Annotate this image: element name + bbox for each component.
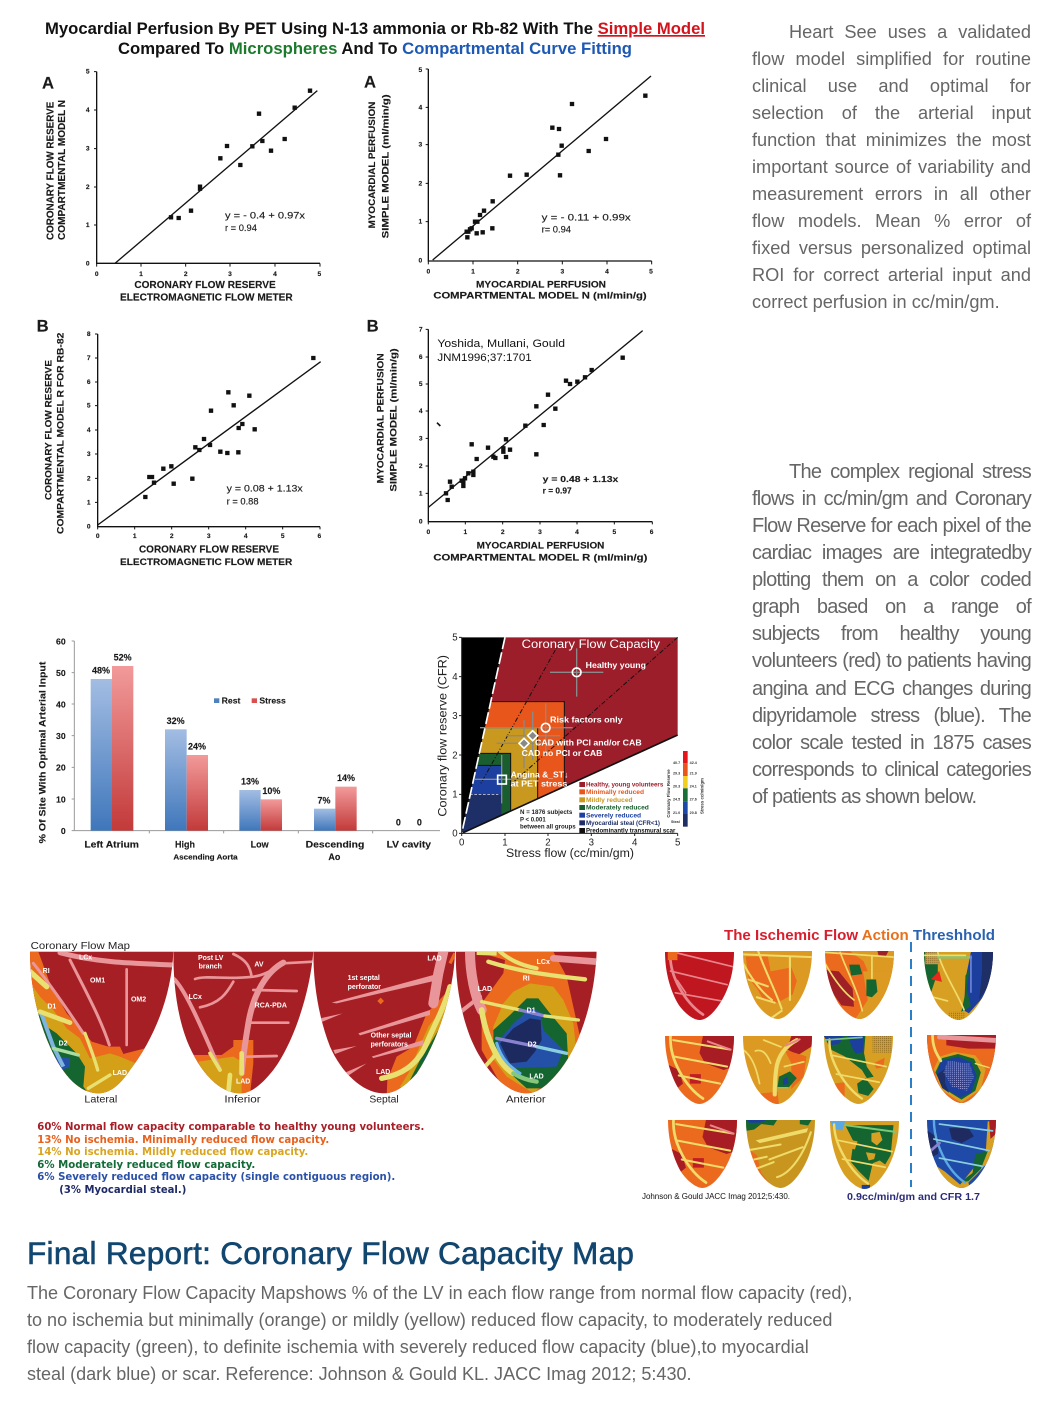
coronary flow map: lateral and inferior views: LAD	[236, 1078, 250, 1085]
small heart: row 3, gold septal view	[746, 1120, 815, 1188]
bar chart: optimal arterial input site	[37, 637, 440, 862]
coronary flow map: septal and anterior views: Anterior	[506, 1095, 547, 1106]
chart: coronary flow capacity: 0	[459, 837, 464, 848]
scatter plot: B, simple model vs compartmental model R: 0	[419, 519, 423, 526]
scatter plot: B, simple model vs compartmental model R: 1	[463, 529, 467, 536]
scatter plot: B, simple model vs compartmental model R: 5	[419, 381, 423, 388]
small heart: row 1, gold with orange	[743, 951, 812, 1019]
coronary flow map: lateral and inferior views: LAD	[113, 1070, 127, 1077]
scatter plot: A, simple model vs compartmental model N: 2	[516, 268, 520, 275]
scatter plot: A, coronary flow reserve vs electromagnetic flow meter: 5	[86, 69, 90, 76]
chart: coronary flow capacity: 1	[452, 790, 458, 801]
scatter plot: A, simple model vs compartmental model N: 0	[418, 257, 422, 264]
bar chart: optimal arterial input site: 30	[56, 731, 66, 741]
scatter plot: A, coronary flow reserve vs electromagnetic flow meter: 4	[86, 107, 90, 114]
bar chart: optimal arterial input site: 32%	[167, 716, 185, 726]
scatter plot: B, simple model vs compartmental model R: 2	[419, 463, 423, 470]
scatter plot: A, coronary flow reserve vs electromagnetic flow meter: COMPARTMENTAL MODEL N	[57, 100, 68, 240]
chart: coronary flow capacity: 2	[545, 837, 551, 848]
scatter plot: A, simple model vs compartmental model N: 1	[471, 268, 475, 275]
coronary flow map: septal and anterior views: D2	[528, 1042, 537, 1049]
colour scale: 20.8	[690, 811, 697, 815]
coronary flow map: septal and anterior views: D1	[527, 1007, 536, 1014]
text block: validated flow model: flow models. Mean % error of	[752, 211, 1031, 231]
flow map percentages legend: (3% Myocardial steal.)	[59, 1183, 186, 1196]
bar chart: optimal arterial input site: LV cavity	[387, 839, 431, 849]
scatter plot: A, coronary flow reserve vs electromagnetic flow meter: CORONARY FLOW RESERVE	[134, 280, 276, 291]
text block: validated flow model: function that minimizes the most	[752, 130, 1031, 150]
heart map: septal	[310, 950, 457, 1097]
coronary flow map: septal and anterior views: Other septal	[371, 1032, 411, 1039]
text block: regional stress flows: color scale tested in 1875 cases	[752, 732, 1031, 754]
text block: validated flow model: ROI for correct arterial input and	[752, 265, 1031, 285]
scatter plot: B, simple model vs compartmental model R: COMPARTMENTAL MODEL R (ml/min/g)	[433, 552, 647, 562]
bar chart: optimal arterial input site: Low	[251, 839, 269, 849]
chart: coronary flow capacity: Healthy young	[586, 660, 646, 670]
text block: validated flow model: clinical use and optimal for	[752, 76, 1031, 96]
scatter plot: B, coronary flow reserve model R for Rb-82: 6	[87, 379, 91, 386]
bar chart: optimal arterial input site: % Of Site With Optimal Arterial Input	[37, 662, 47, 843]
colour scale: Steal	[671, 820, 680, 824]
capacity legend: Moderately reduced	[586, 805, 649, 812]
scatter plot: B, simple model vs compartmental model R: JNM1996;37:1701	[437, 352, 532, 364]
scatter plot: B, simple model vs compartmental model R: 6	[650, 529, 654, 536]
scatter plot: A, simple model vs compartmental model N: y = - 0.11 + 0.99x	[542, 212, 631, 222]
scatter plot: A, coronary flow reserve vs electromagnetic flow meter	[42, 69, 321, 303]
coronary flow map: septal and anterior views: 1st septal	[348, 975, 380, 982]
scatter plot: B, coronary flow reserve model R for Rb-82: 4	[87, 427, 91, 434]
coronary flow map: lateral and inferior views: Post LV	[198, 955, 224, 962]
scatter plot: B, simple model vs compartmental model R: SIMPLE MODEL (ml/min/g)	[389, 348, 399, 492]
coronary flow map: lateral and inferior views: OM2	[131, 997, 146, 1004]
scatter plot: A, simple model vs compartmental model N: MYOCARDIAL PERFUSION	[476, 279, 606, 289]
scatter plot: A, coronary flow reserve vs electromagnetic flow meter: 0	[86, 260, 90, 267]
text block: regional stress flows: corresponds to clinical categories	[752, 759, 1031, 781]
scatter plot: B, coronary flow reserve model R for Rb-82: 4	[244, 533, 248, 540]
scatter plot: B, coronary flow reserve model R for Rb-82: B	[37, 317, 49, 336]
text block: regional stress flows: subjects from healthy young	[752, 623, 1031, 645]
coronary flow map: lateral and inferior views: RI	[43, 968, 50, 975]
bar chart: optimal arterial input site: 0	[396, 818, 401, 828]
scatter plot: B, coronary flow reserve model R for Rb-82: 6	[317, 533, 321, 540]
capacity legend: Myocardial steal (CFR<1)	[586, 820, 660, 827]
capacity legend: Minimally reduced	[586, 789, 644, 796]
chart: coronary flow capacity: CAD no PCI or CAB	[522, 748, 602, 758]
scatter plot: A, simple model vs compartmental model N	[364, 67, 653, 301]
chart: coronary flow capacity: Angina &_ST↓	[511, 769, 568, 779]
coronary flow map: septal and anterior views: LAD	[478, 986, 492, 993]
threshold values caption: 0.9cc/min/gm and CFR 1.7	[847, 1191, 980, 1203]
chart: coronary flow capacity: Coronary Flow Capacity	[522, 638, 660, 651]
text block: validated flow model: important source of variability and	[752, 157, 1031, 177]
scatter plot: B, coronary flow reserve model R for Rb-82: 0	[87, 524, 91, 531]
bar chart: optimal arterial input site: Ascending Aorta	[173, 854, 238, 861]
bar chart: optimal arterial input site: 0	[61, 826, 66, 836]
colour scale: 29.3	[673, 771, 680, 775]
bar chart: optimal arterial input site: 13%	[241, 776, 259, 786]
coronary flow map: lateral and inferior views: Lateral	[84, 1095, 117, 1106]
scatter plot: A, coronary flow reserve vs electromagnetic flow meter: 1	[139, 271, 143, 278]
text block: regional stress flows: dipyridamole stress (blue). The	[752, 705, 1031, 727]
text block: final report description	[27, 1283, 852, 1384]
scatter plot: B, simple model vs compartmental model R: 1	[419, 490, 423, 497]
scatter plot: B, simple model vs compartmental model R: B	[367, 317, 379, 336]
scatter plot: A, simple model vs compartmental model N: 1	[418, 219, 422, 226]
scatter plot: B, simple model vs compartmental model R: 7	[419, 326, 423, 333]
coronary flow map: lateral and inferior views: LCx	[79, 955, 92, 962]
text block: regional stress flows	[752, 461, 1032, 808]
scatter plot: B, simple model vs compartmental model R	[367, 317, 654, 562]
scatter plot: A, coronary flow reserve vs electromagnetic flow meter: ELECTROMAGNETIC FLOW METER	[120, 292, 293, 303]
chart: coronary flow capacity: at PET stress	[511, 778, 568, 788]
colour scale: Stress cc/min/gm	[699, 778, 704, 814]
heart map: lateral	[30, 952, 174, 1094]
scatter plot: B, simple model vs compartmental model R: 3	[419, 435, 423, 442]
flow map percentages legend: 6% Severely reduced flow capacity (single contiguous region).	[37, 1170, 395, 1183]
scatter plot: A, simple model vs compartmental model N: A	[364, 72, 376, 91]
flow map percentages legend	[37, 1120, 424, 1196]
capacity legend	[579, 782, 676, 835]
bar chart: optimal arterial input site: 10	[56, 794, 66, 804]
scatter plot: A, simple model vs compartmental model N: 3	[418, 142, 422, 149]
scatter plot: A, simple model vs compartmental model N: 4	[418, 104, 422, 111]
scatter plot: B, simple model vs compartmental model R: Yoshida, Mullani, Gould	[437, 338, 565, 350]
flow map percentages legend: 13% No ischemia. Minimally reduced flow capacity.	[37, 1133, 329, 1146]
chart: coronary flow capacity: Risk factors only	[550, 714, 623, 724]
scatter plot: A, simple model vs compartmental model N: 3	[560, 268, 564, 275]
text block: validated flow model: measurement errors in all other	[752, 184, 1031, 204]
bar chart: optimal arterial input site: 52%	[114, 653, 132, 663]
threshold title: The Ischemic Flow Action Threshhold	[724, 927, 995, 944]
chart: coronary flow capacity: 5	[452, 633, 458, 644]
scatter plot: B, simple model vs compartmental model R: 4	[575, 529, 579, 536]
scatter plot: A, coronary flow reserve vs electromagnetic flow meter: 3	[228, 271, 232, 278]
scatter plot: B, coronary flow reserve model R for Rb-82: 0	[96, 533, 100, 540]
bar chart: optimal arterial input site: 20	[56, 763, 66, 773]
text block: validated flow model: fixed versus personalized optimal	[752, 238, 1031, 258]
scatter plot: B, simple model vs compartmental model R: 5	[612, 529, 616, 536]
scatter plot: A, coronary flow reserve vs electromagnetic flow meter: 5	[317, 271, 321, 278]
text block: regional stress flows: Flow Reserve for each pixel of the	[752, 515, 1031, 537]
coronary flow map: lateral and inferior views: Coronary Flow Map	[31, 941, 130, 952]
scatter plot: B, coronary flow reserve model R for Rb-82: 2	[87, 475, 91, 482]
text block: regional stress flows: of patients as shown below.	[752, 786, 976, 808]
flow capacity colour zones	[462, 637, 678, 833]
scatter plot: B, coronary flow reserve model R for Rb-82: 5	[87, 403, 91, 410]
scatter plot: B, coronary flow reserve model R for Rb-82: COMPARTMENTAL MODEL R FOR RB-82	[55, 333, 65, 534]
scatter plot: A, coronary flow reserve vs electromagnetic flow meter: 1	[86, 222, 90, 229]
coronary flow map: lateral and inferior views: D2	[59, 1041, 68, 1048]
bar chart: optimal arterial input site: 60	[56, 637, 66, 647]
text block: final report description: flow capacity (green), to definite ischemia with severely reduced flow capacity (blue),to myocardial	[27, 1337, 809, 1357]
scatter plot: B, simple model vs compartmental model R: 3	[538, 529, 542, 536]
text block: validated flow model: flow model simplified for routine	[752, 49, 1031, 69]
scatter plot: B, coronary flow reserve model R for Rb-82: CORONARY FLOW RESERVE	[44, 360, 54, 500]
coronary flow map: septal and anterior views: perforators	[371, 1042, 408, 1049]
scatter plot: A, coronary flow reserve vs electromagnetic flow meter: CORONARY FLOW RESERVE	[45, 101, 56, 240]
chart: coronary flow capacity: 2	[452, 750, 458, 761]
bar chart: optimal arterial input site: 48%	[92, 666, 110, 676]
bar chart: optimal arterial input site: 10%	[262, 786, 280, 796]
text block: regional stress flows: flows in cc/min/gm and Coronary	[752, 488, 1031, 510]
text block: regional stress flows: cardiac images are integratedby	[752, 542, 1031, 564]
title: Myocardial Perfusion By PET Using N-13 ammonia or Rb-82 With The Simple Model	[45, 19, 705, 38]
scatter plot: B, coronary flow reserve model R for Rb-82: 2	[170, 533, 174, 540]
scatter plot: B, coronary flow reserve model R for Rb-82: 7	[87, 355, 91, 362]
colour scale: 21.0	[673, 811, 680, 815]
chart: coronary flow capacity: N = 1876 subjects	[520, 810, 573, 816]
chart: coronary flow capacity: 4	[452, 672, 458, 683]
scatter plot: A, simple model vs compartmental model N: SIMPLE MODEL (ml/min/g)	[380, 94, 390, 238]
coronary flow map: lateral and inferior views: Inferior	[224, 1095, 262, 1106]
small heart: row 2, large blue hatched defect	[927, 1035, 996, 1103]
scatter plot: A, coronary flow reserve vs electromagnetic flow meter: A	[42, 73, 54, 92]
chart: coronary flow capacity: 1	[502, 837, 508, 848]
scatter plot: B, coronary flow reserve model R for Rb-82: 3	[207, 533, 211, 540]
bar chart: optimal arterial input site: Descending	[306, 839, 364, 849]
scatter plot: A, coronary flow reserve vs electromagnetic flow meter: 0	[95, 271, 99, 278]
scatter plot: B, simple model vs compartmental model R: r = 0.97	[543, 485, 572, 495]
scatter plot: A, coronary flow reserve vs electromagnetic flow meter: y = - 0.4 + 0.97x	[225, 211, 305, 221]
small hearts citation: Johnson & Gould JACC Imag 2012;5:430.	[642, 1192, 790, 1201]
scatter plot: B, coronary flow reserve model R for Rb-82: 5	[281, 533, 285, 540]
bar chart: optimal arterial input site: 50	[56, 668, 66, 678]
scatter plot: B, coronary flow reserve model R for Rb-82: y = 0.08 + 1.13x	[227, 484, 303, 494]
chart: coronary flow capacity: 3	[589, 837, 594, 848]
scatter plot: B, coronary flow reserve model R for Rb-82: ELECTROMAGNETIC FLOW METER	[120, 557, 293, 567]
scatter plot: B, coronary flow reserve model R for Rb-82: 3	[87, 451, 91, 458]
scatter plot: A, simple model vs compartmental model N: 5	[649, 268, 653, 275]
coronary flow map: lateral and inferior views: AV	[254, 962, 264, 969]
coronary flow map: septal and anterior views: LAD	[427, 956, 442, 963]
coronary flow map: lateral and inferior views: branch	[199, 963, 222, 970]
scatter plot: A, simple model vs compartmental model N: COMPARTMENTAL MODEL N (ml/min/g)	[433, 291, 647, 301]
small heart: row 1, all red	[665, 952, 734, 1020]
colour scale: 21.9	[690, 771, 697, 775]
text block: validated flow model	[752, 22, 1032, 312]
scatter plot: B, coronary flow reserve model R for Rb-82: r = 0.88	[227, 496, 259, 506]
small heart: row 1, threshold case blue right	[924, 952, 993, 1020]
chart: coronary flow capacity: 3	[452, 711, 458, 722]
capacity legend: Predominantly transmural scar	[586, 828, 676, 835]
capacity legend: Severely reduced	[586, 812, 641, 819]
scatter plot: B, simple model vs compartmental model R: 0	[426, 529, 430, 536]
scatter plot: A, simple model vs compartmental model N: 4	[605, 268, 609, 275]
small heart: row 2, orange with red top right	[665, 1036, 734, 1104]
scatter plot: A, simple model vs compartmental model N: 0	[426, 268, 430, 275]
small heart: row 3, green lattice	[830, 1121, 899, 1189]
chart: coronary flow capacity: P < 0.001	[520, 817, 546, 823]
coronary flow map: septal and anterior views: RI	[523, 976, 530, 983]
scatter plot: A, coronary flow reserve vs electromagnetic flow meter: 2	[184, 271, 188, 278]
chart: coronary flow capacity	[436, 633, 704, 860]
scatter plot: B, simple model vs compartmental model R: 4	[419, 408, 423, 415]
scatter plot: B, coronary flow reserve model R for Rb-82: 1	[133, 533, 137, 540]
chart: coronary flow capacity: Stress flow (cc/min/gm)	[506, 846, 634, 860]
heart map: inferior	[170, 950, 317, 1097]
scatter plot: A, simple model vs compartmental model N: 2	[418, 180, 422, 187]
scatter plot: B, coronary flow reserve model R for Rb-82: 1	[87, 499, 91, 506]
text block: validated flow model: correct perfusion in cc/min/gm.	[752, 292, 1000, 312]
chart: coronary flow capacity: 5	[675, 837, 680, 848]
chart: coronary flow capacity: Coronary flow reserve (CFR)	[436, 655, 450, 817]
scatter plot: A, simple model vs compartmental model N: 5	[418, 67, 422, 74]
colour scale: 20.3	[673, 784, 680, 788]
text block: regional stress flows: volunteers (red) to patients having	[752, 650, 1031, 672]
bar chart: optimal arterial input site: 24%	[188, 742, 206, 752]
capacity legend: Healthy, young volunteers	[586, 782, 664, 789]
scatter plot: A, simple model vs compartmental model N: r= 0.94	[542, 224, 571, 234]
coronary flow map: lateral and inferior views: RCA-PDA	[255, 1003, 287, 1010]
chart: coronary flow capacity: CAD with PCI and/or CAB	[535, 737, 642, 747]
colour scale: 42.4	[690, 761, 698, 765]
flow map percentages legend: 6% Moderately reduced flow capacity.	[37, 1158, 255, 1171]
coronary flow map: septal and anterior views: LCx	[537, 959, 550, 966]
small heart: row 3, predominantly blue	[927, 1120, 996, 1188]
chart: coronary flow capacity: 4	[632, 837, 638, 848]
scatter plot: A, simple model vs compartmental model N: MYOCARDIAL PERFUSION	[367, 102, 377, 228]
scatter plot: A, coronary flow reserve vs electromagnetic flow meter: 4	[273, 271, 277, 278]
text block: final report description: The Coronary Flow Capacity Mapshows % of the LV in each flow range from normal flow capacity (red),	[27, 1283, 852, 1303]
text block: validated flow model: selection of the arterial input	[752, 103, 1031, 123]
colour scale: 40.7	[673, 761, 680, 765]
bar chart: optimal arterial input site: 40	[56, 699, 66, 709]
colour scale: Coronary Flow Reserve	[666, 769, 671, 818]
title	[45, 19, 705, 58]
scatter plot: A, coronary flow reserve vs electromagnetic flow meter: 3	[86, 146, 90, 153]
bar chart: optimal arterial input site: 0	[417, 818, 422, 828]
bar chart: optimal arterial input site: High	[175, 839, 195, 849]
colour scale: 24.5	[673, 798, 680, 802]
coronary flow map: lateral and inferior views	[20, 941, 317, 1106]
coronary flow map: septal and anterior views: LAD	[529, 1073, 544, 1080]
text block: final report description: steal (dark blue) or scar. Reference: Johnson & Gould KL. JACC Imag 2012; 5:430.	[27, 1364, 692, 1384]
coronary flow map: septal and anterior views	[310, 950, 600, 1106]
chart: coronary flow capacity: 0	[452, 829, 458, 840]
text block: final report description: to no ischemia but minimally (orange) or mildly (yellow) reduced flow capacity, to moderately reduced	[27, 1310, 832, 1330]
flow map percentages legend: 60% Normal flow capacity comparable to healthy young volunteers.	[37, 1120, 424, 1133]
flow map percentages legend: 14% No ischemia. Mildly reduced flow capacity.	[37, 1145, 308, 1158]
coronary flow map: lateral and inferior views: OM1	[90, 977, 105, 984]
threshold dashed line	[910, 942, 912, 1187]
coronary flow map: septal and anterior views: perforator	[348, 984, 381, 991]
bar chart: optimal arterial input site: Left Atrium	[84, 839, 139, 849]
bar chart: optimal arterial input site: Ao	[328, 852, 341, 862]
text block: validated flow model: Heart See uses a validated	[789, 22, 1031, 42]
scatter plot: B, coronary flow reserve model R for Rb-82: CORONARY FLOW RESERVE	[139, 544, 280, 555]
scatter plot: B, simple model vs compartmental model R: MYOCARDIAL PERFUSION	[375, 353, 385, 483]
title: Compared To Microspheres And To Compartmental Curve Fitting	[118, 39, 632, 58]
small heart: row 2, gold with green and top hatch	[824, 1036, 893, 1104]
scatter plot: B, simple model vs compartmental model R: 2	[501, 529, 505, 536]
colour scale: 24.1	[690, 784, 697, 788]
scatter plot: B, simple model vs compartmental model R: 6	[419, 354, 423, 361]
coronary flow map: lateral and inferior views: D1	[47, 1004, 56, 1011]
text block: regional stress flows: angina and ECG changes during	[752, 678, 1031, 700]
scatter plot: A, coronary flow reserve vs electromagnetic flow meter: 2	[86, 184, 90, 191]
capacity legend: Mildly reduced	[586, 797, 633, 804]
small heart: row 1, mixed with green patches	[825, 951, 894, 1019]
coronary flow map: lateral and inferior views: LCx	[189, 994, 202, 1001]
coronary flow map: septal and anterior views: LAD	[376, 1069, 390, 1076]
bar chart: optimal arterial input site: 7%	[317, 796, 330, 806]
text block: regional stress flows: The complex regional stress	[789, 461, 1031, 483]
heart map: anterior	[453, 950, 600, 1097]
text block: regional stress flows: plotting them on a color coded	[752, 569, 1031, 591]
scatter plot: A, coronary flow reserve vs electromagnetic flow meter: r = 0.94	[225, 223, 257, 233]
scatter plot: B, coronary flow reserve model R for Rb-82: 8	[87, 331, 91, 338]
bar chart: optimal arterial input site: Stress	[259, 696, 286, 706]
small heart: row 3, orange with red top right	[668, 1120, 737, 1188]
scatter plot: B, simple model vs compartmental model R: y = 0.48 + 1.13x	[543, 474, 619, 484]
bar chart: optimal arterial input site: 14%	[337, 773, 355, 783]
scatter plot: B, coronary flow reserve model R for Rb-82	[37, 317, 321, 567]
colour scale: 27.6	[690, 798, 697, 802]
error crosses and group markers	[475, 648, 603, 803]
scatter plot: B, simple model vs compartmental model R: MYOCARDIAL PERFUSION	[477, 540, 604, 550]
colour scale	[666, 751, 704, 827]
heading: final report: Final Report: Coronary Flow Capacity Map	[27, 1235, 634, 1271]
coronary flow map: septal and anterior views: Septal	[369, 1095, 399, 1106]
text block: regional stress flows: graph based on a range of	[752, 596, 1031, 618]
bar chart: optimal arterial input site: Rest	[222, 696, 241, 706]
chart: coronary flow capacity: between all groups	[520, 825, 576, 831]
small heart: row 2, gold with small ischemic spot	[743, 1036, 812, 1104]
